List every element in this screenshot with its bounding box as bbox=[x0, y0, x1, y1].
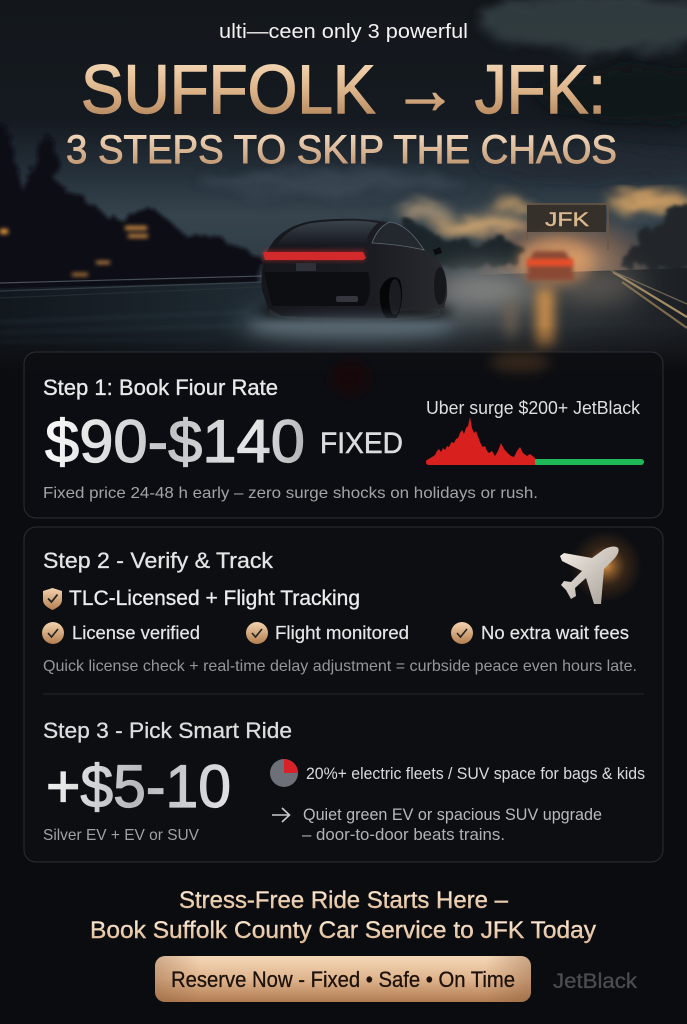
step 2 heading: Step 2 - Verify & Track bbox=[43, 548, 274, 573]
sky bbox=[0, 0, 687, 300]
distant red car bbox=[517, 238, 593, 286]
eyebrow text: ulti—ceen only 3 powerful bbox=[219, 20, 468, 43]
front mist over tyres bbox=[250, 317, 450, 339]
icon: arrow bbox=[272, 808, 290, 822]
tree line right bbox=[620, 205, 687, 270]
step 1 description: Fixed price 24-48 h early – zero surge shocks on holidays or rush. bbox=[43, 485, 538, 502]
main title bbox=[66, 51, 617, 172]
call to action headline: Stress-Free Ride Starts Here – bbox=[179, 887, 509, 914]
icon: glowing plane bbox=[560, 530, 642, 604]
storm clouds bbox=[200, 0, 687, 194]
JFK gantry sign bbox=[527, 203, 608, 250]
wet road streaks bbox=[0, 312, 250, 342]
JFK gantry sign: JFK bbox=[545, 210, 589, 231]
hero scene: car on wet highway at dusk bbox=[0, 0, 687, 400]
pie chart: 20 percent electric bbox=[270, 759, 298, 787]
reserve button bbox=[155, 956, 531, 1002]
title line one: SUFFOLK → JFK: bbox=[81, 51, 606, 128]
panel background steps 2 and 3 bbox=[24, 527, 663, 862]
sunset cloud breaks bbox=[399, 193, 687, 235]
amber road reflection bbox=[505, 288, 554, 348]
icon: shield check bbox=[43, 588, 62, 610]
surge vs fixed chart bbox=[426, 417, 644, 465]
panel: step 1 bbox=[24, 352, 663, 518]
check item: flight monitored: Flight monitored bbox=[275, 623, 409, 643]
step 1 price: $90-$140 bbox=[45, 408, 305, 475]
upgrade note: Quiet green EV or spacious SUV upgrade bbox=[303, 806, 602, 824]
credentials line: TLC-Licensed + Flight Tracking bbox=[69, 587, 360, 610]
step 3 heading: Step 3 - Pick Smart Ride bbox=[43, 718, 292, 743]
step 1 heading: Step 1: Book Fiour Rate bbox=[43, 375, 278, 400]
check item: license verified: License verified bbox=[72, 623, 200, 643]
step 3 price: +$5-10 bbox=[46, 753, 231, 820]
check item: no extra wait fees: No extra wait fees bbox=[481, 623, 629, 643]
call to action headline bbox=[90, 887, 596, 944]
roadside lights bbox=[0, 226, 148, 276]
upgrade note: – door-to-door beats trains. bbox=[302, 826, 505, 844]
surge chart label: Uber surge $200+ JetBlack bbox=[426, 398, 641, 418]
panel background step 1 bbox=[24, 352, 663, 518]
title line two: 3 STEPS TO SKIP THE CHAOS bbox=[66, 128, 617, 172]
faint reflections through the panel bbox=[330, 352, 550, 396]
distant trees bbox=[262, 222, 525, 275]
guard rail left bbox=[0, 276, 262, 298]
upgrade note bbox=[302, 806, 602, 844]
step 3 price caption: Silver EV + EV or SUV bbox=[43, 827, 199, 844]
call to action headline: Book Suffolk County Car Service to JFK Today bbox=[90, 917, 596, 944]
brand wordmark: JetBlack bbox=[553, 970, 638, 993]
fade into dark bbox=[0, 325, 687, 372]
fixed label: FIXED bbox=[320, 427, 403, 460]
foreground car bbox=[257, 219, 453, 321]
horizon glow bbox=[477, 218, 648, 274]
road mist bbox=[240, 269, 640, 346]
panel: steps 2 and 3 bbox=[24, 527, 663, 862]
fixed price green bar bbox=[533, 459, 644, 465]
electric fleets stat: 20%+ electric fleets / SUV space for bags & kids bbox=[306, 765, 645, 783]
surge red spikes bbox=[426, 417, 535, 465]
guard rail right bbox=[610, 270, 687, 328]
tree line left bbox=[0, 123, 264, 288]
step 2 description: Quick license check + real-time delay adjustment = curbside peace even hours late. bbox=[43, 658, 637, 675]
road bbox=[0, 268, 687, 357]
reserve button: Reserve Now - Fixed • Safe • On Time bbox=[171, 967, 515, 992]
